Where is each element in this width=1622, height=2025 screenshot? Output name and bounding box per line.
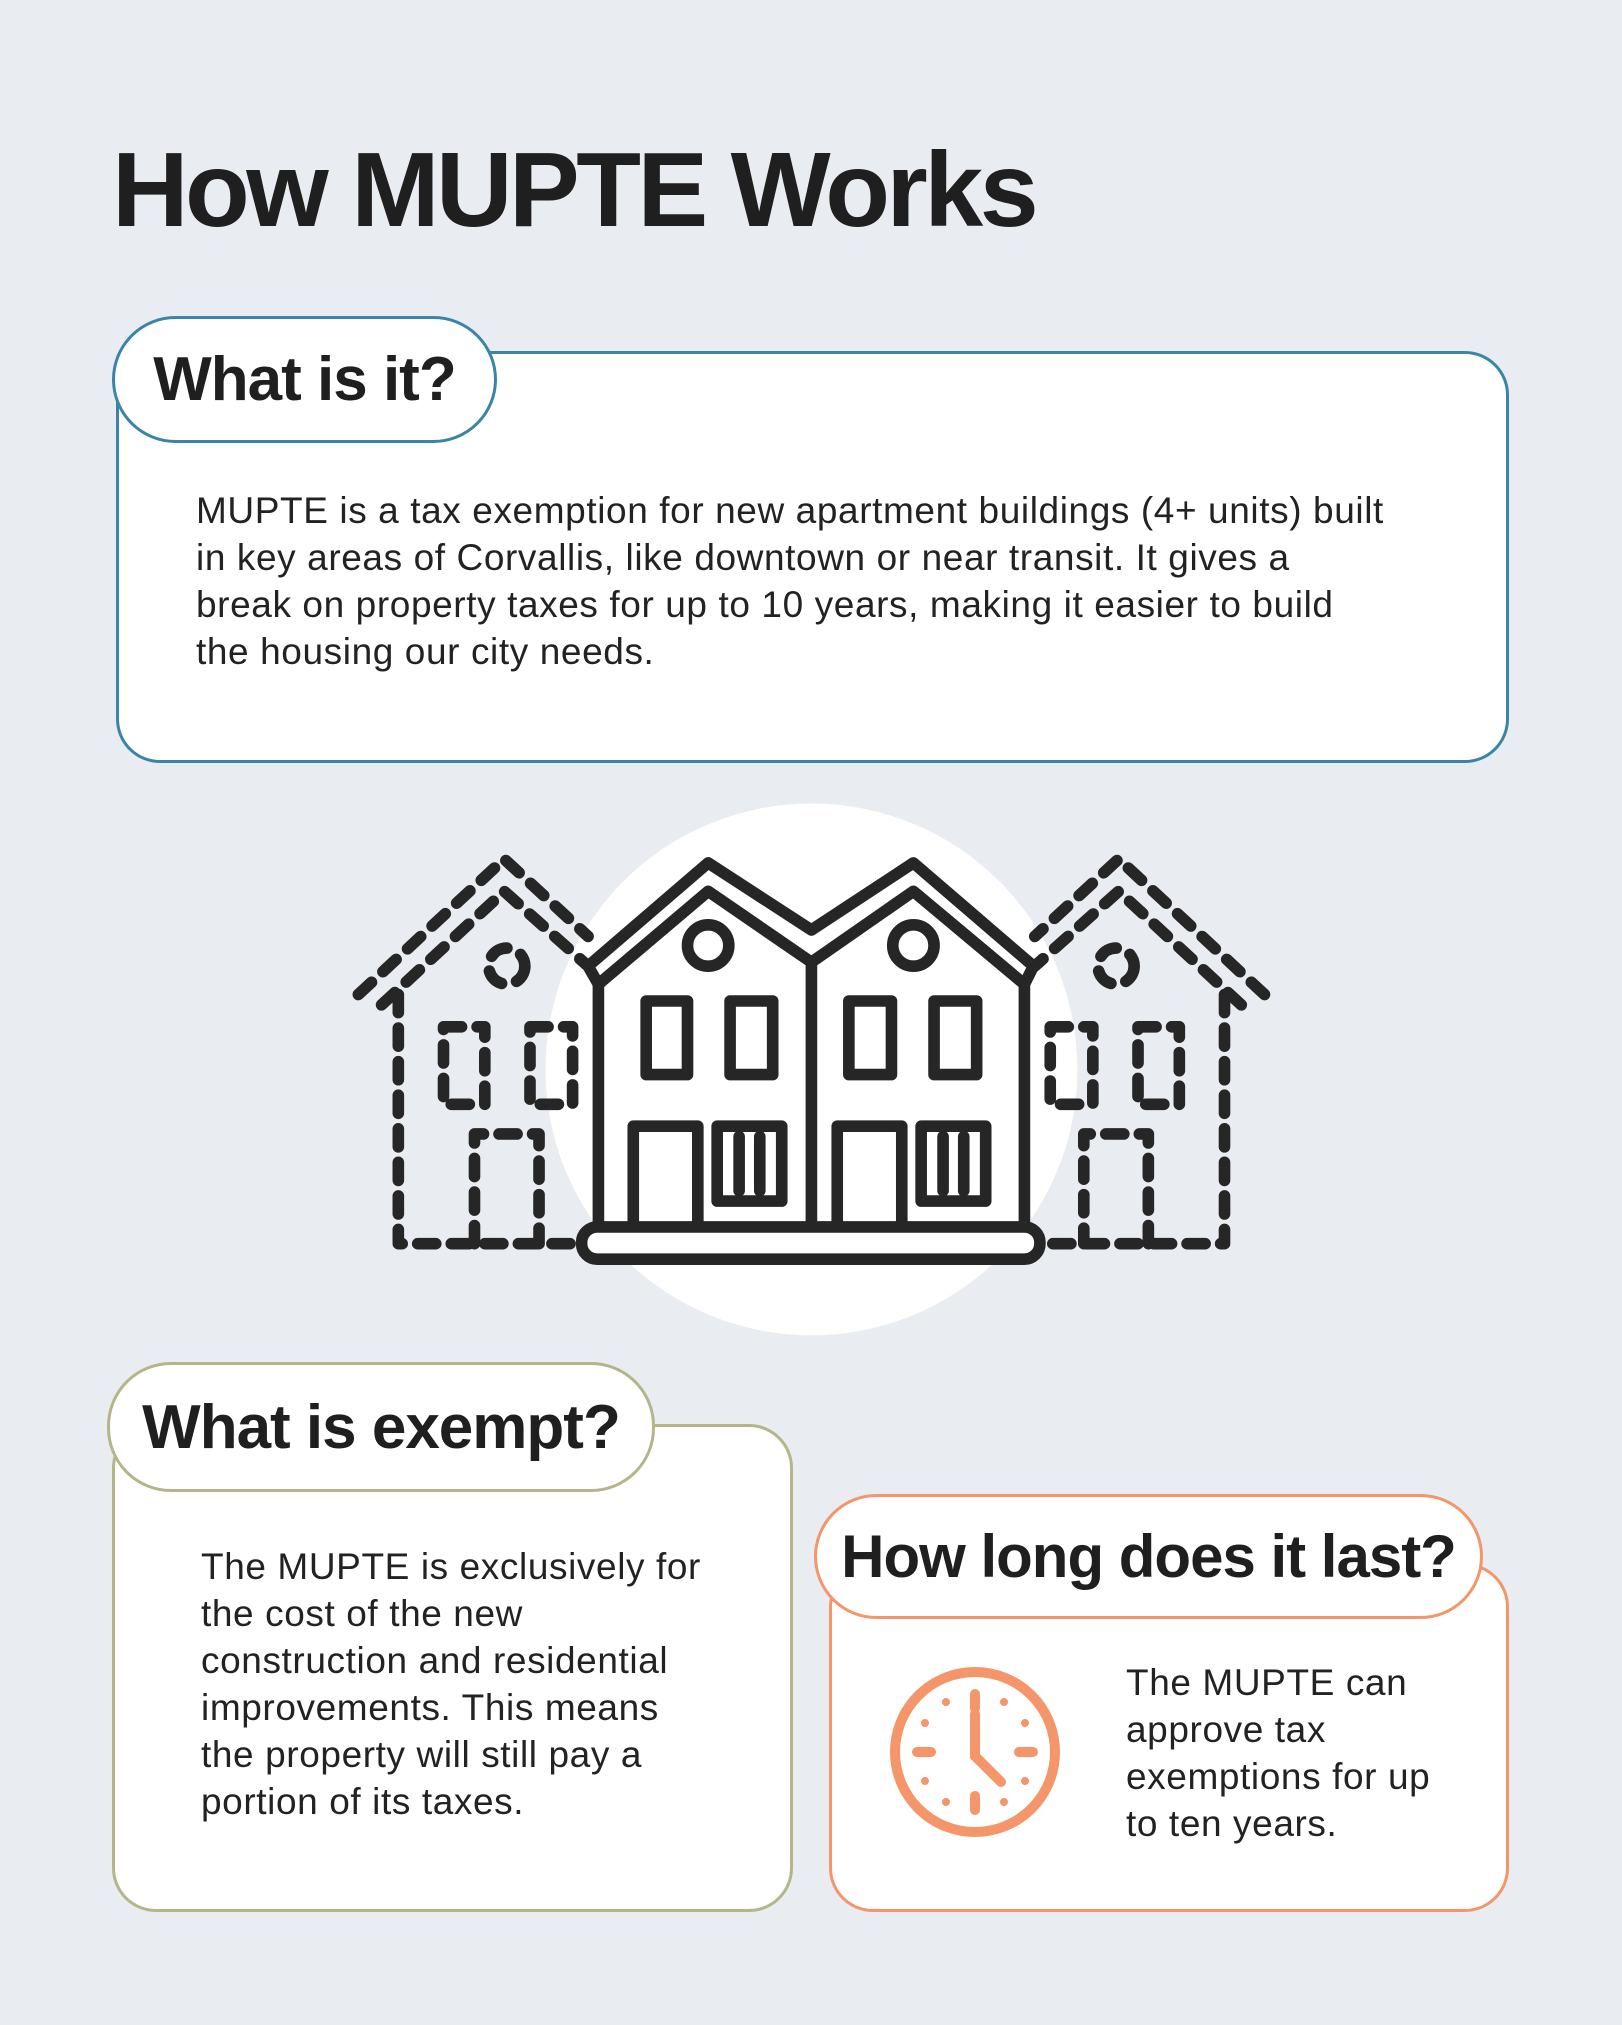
text: exempt body: construction and residential <box>201 1640 668 1681</box>
text: exempt body: the property will still pay a <box>201 1734 642 1775</box>
text: how long body: to ten years. <box>1126 1803 1337 1844</box>
text: how long body: approve tax <box>1126 1709 1326 1750</box>
text: exempt body: the cost of the new <box>201 1593 523 1634</box>
text: exempt body <box>201 1546 701 1822</box>
icon: clock <box>890 1667 1060 1837</box>
text: what is it body <box>196 490 1384 672</box>
text: what is it body: in key areas of Corvallis, like downtown or near transit. It gives a <box>196 537 1290 578</box>
text: what is it body: the housing our city needs. <box>196 631 654 672</box>
text: what is it body: MUPTE is a tax exemption for new apartment buildings (4+ units) built <box>196 490 1384 531</box>
tab: what is it <box>112 316 497 443</box>
panel: what is it <box>116 351 1509 763</box>
illustration: houses <box>352 804 1270 1336</box>
tab: what is exempt: What is exempt? <box>142 1392 620 1462</box>
title: How MUPTE Works <box>112 131 1035 249</box>
text: what is it body: break on property taxes for up to 10 years, making it easier to build <box>196 584 1334 625</box>
tab: how long <box>814 1494 1483 1619</box>
text: exempt body: improvements. This means <box>201 1687 659 1728</box>
text: exempt body: The MUPTE is exclusively for <box>201 1546 701 1587</box>
text: how long body: The MUPTE can <box>1126 1662 1407 1703</box>
panel: what is exempt <box>112 1424 793 1912</box>
text: how long body: exemptions for up <box>1126 1756 1430 1797</box>
text: how long body <box>1126 1662 1430 1844</box>
tab: what is it: What is it? <box>153 345 456 414</box>
text: exempt body: portion of its taxes. <box>201 1781 524 1822</box>
tab: what is exempt <box>107 1362 655 1492</box>
panel: how long <box>829 1563 1509 1912</box>
tab: how long: How long does it last? <box>841 1523 1456 1590</box>
